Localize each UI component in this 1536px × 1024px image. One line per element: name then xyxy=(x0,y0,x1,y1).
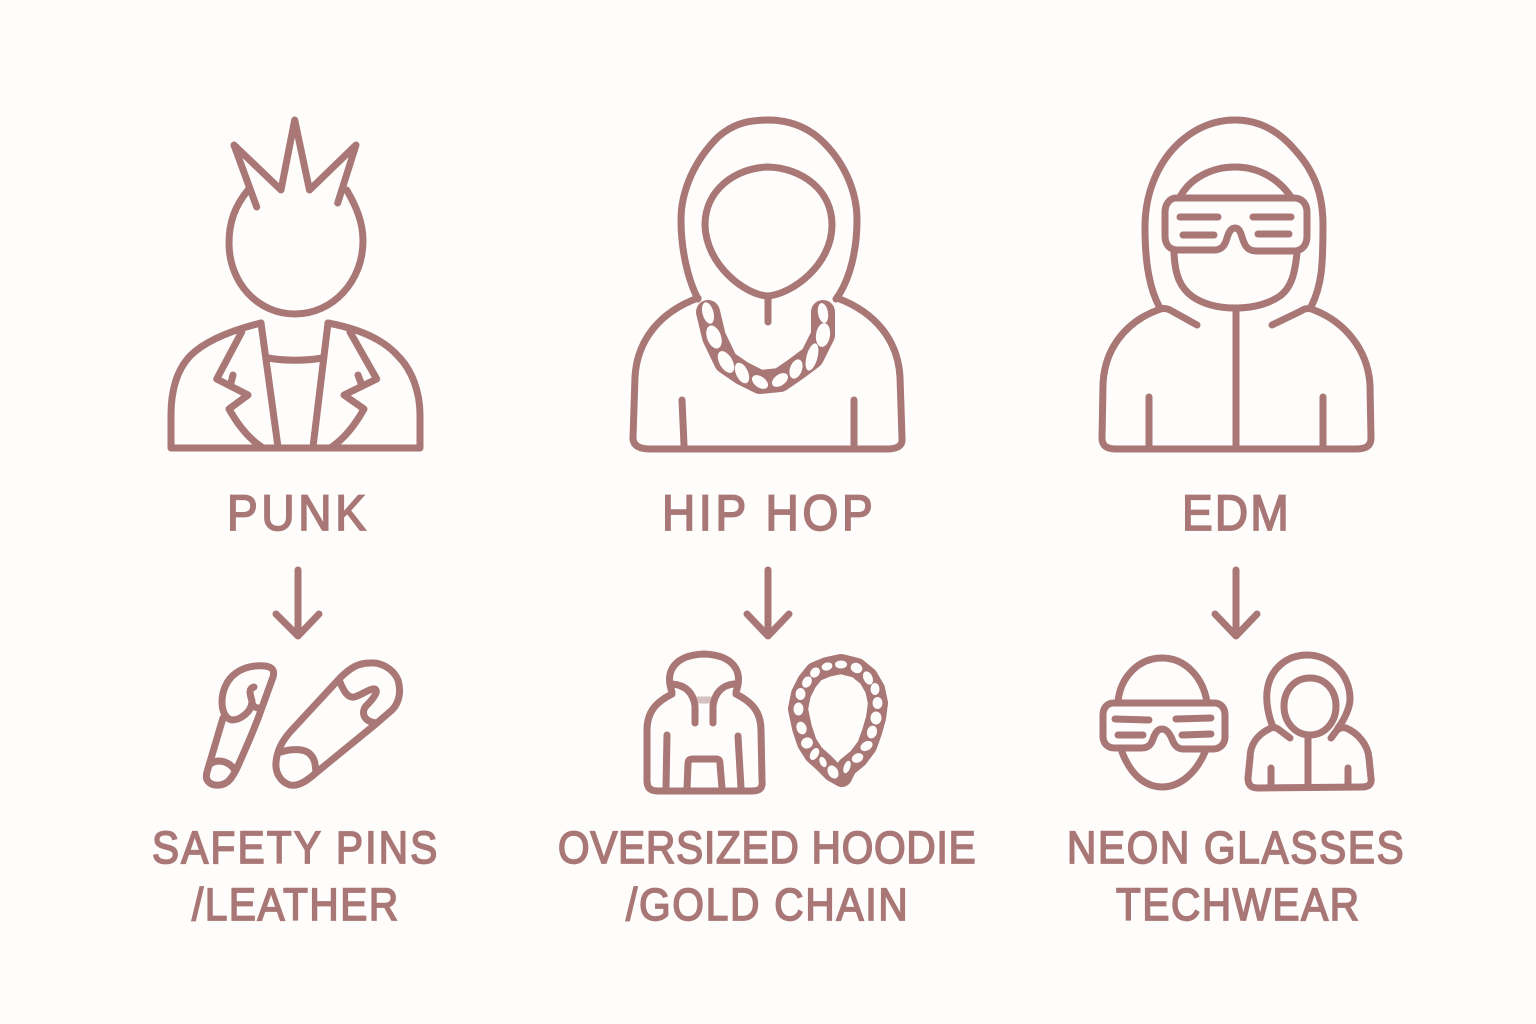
label: neon glasses techwear xyxy=(1067,823,1404,931)
icon: gold chain xyxy=(794,660,882,781)
heading: edm: EDM xyxy=(1182,486,1289,541)
panel: hip hop xyxy=(558,120,976,931)
icon: safety pin large xyxy=(276,663,400,785)
arrow: edm xyxy=(1215,570,1257,636)
label: safety pins / leather: SAFETY PINS xyxy=(152,823,437,874)
icon: hip hop figure xyxy=(633,120,902,449)
heading: punk: PUNK xyxy=(227,486,366,541)
icon: punk figure xyxy=(171,120,420,448)
icon: oversized hoodie xyxy=(647,654,762,791)
arrow: hip hop xyxy=(747,570,789,636)
icon: safety pin small xyxy=(206,666,274,785)
label: oversized hoodie / gold chain: /GOLD CHAIN xyxy=(626,880,908,931)
panel: edm xyxy=(1067,120,1404,931)
label: safety pins / leather: /LEATHER xyxy=(192,880,398,931)
label: neon glasses techwear: TECHWEAR xyxy=(1116,880,1359,931)
label: oversized hoodie / gold chain xyxy=(558,823,976,931)
necklace xyxy=(700,301,832,392)
icon: techwear hoodie xyxy=(1248,655,1371,788)
label: neon glasses techwear: NEON GLASSES xyxy=(1067,823,1404,874)
label: oversized hoodie / gold chain: OVERSIZED HOODIE xyxy=(558,823,976,874)
label: safety pins / leather xyxy=(152,823,437,931)
icon: neon glasses xyxy=(1103,658,1225,787)
heading: hip hop: HIP HOP xyxy=(662,486,873,541)
icon: edm figure xyxy=(1102,120,1371,449)
arrow: punk xyxy=(276,570,319,636)
panel: punk xyxy=(152,120,437,931)
